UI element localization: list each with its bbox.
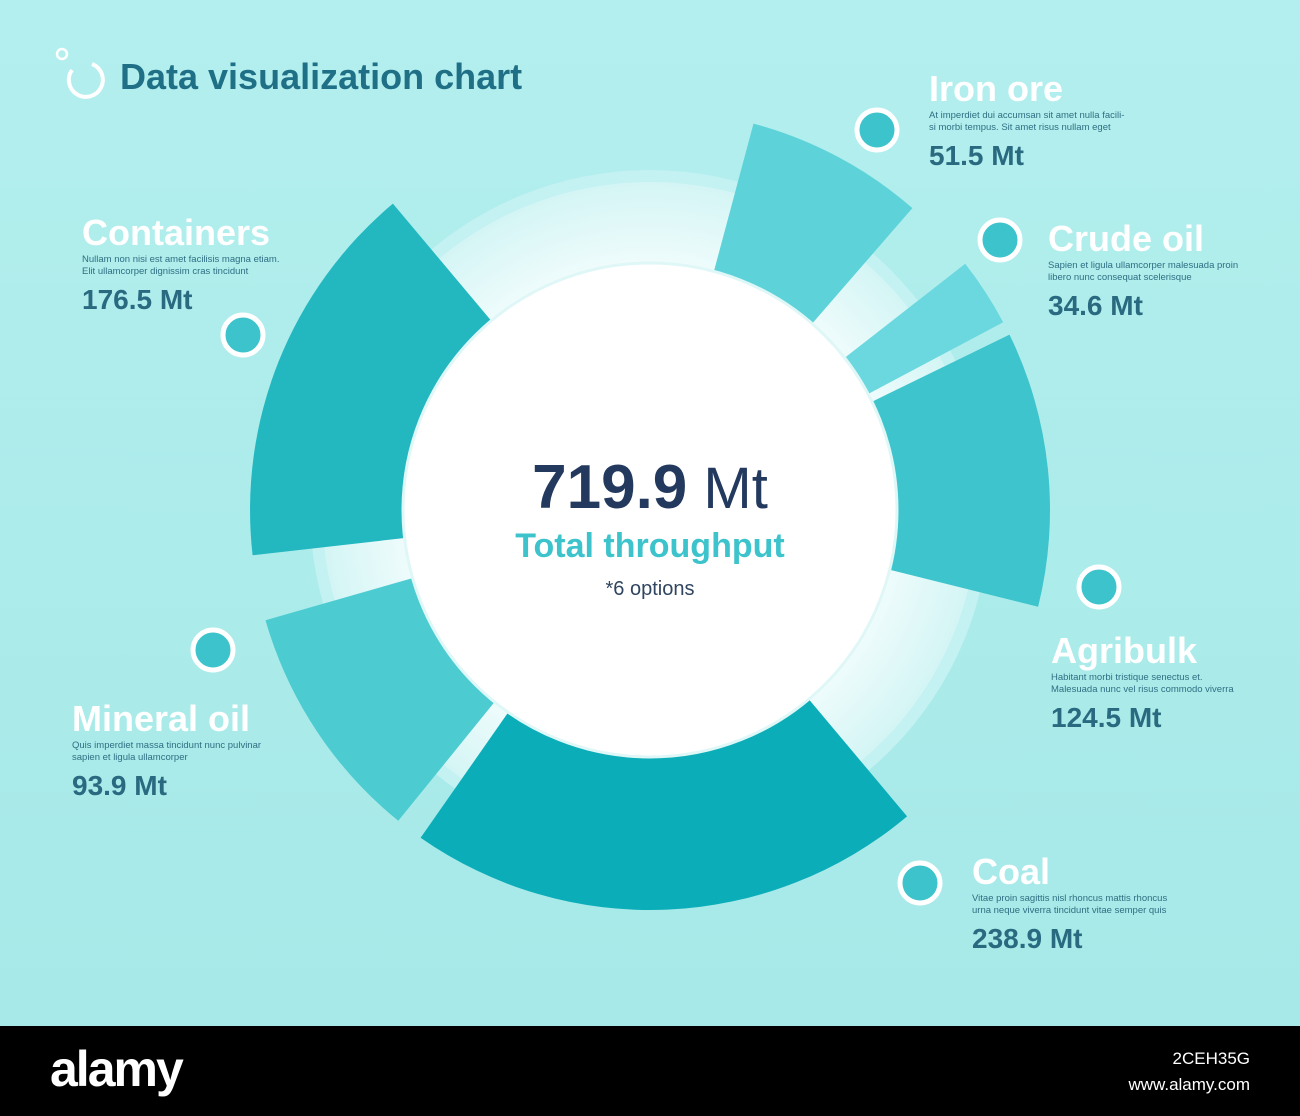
label: iron ore: si morbi tempus. Sit amet risus nullam eget bbox=[929, 122, 1111, 133]
title icon bbox=[57, 49, 103, 97]
footer bar: 2CEH35G bbox=[1173, 1049, 1250, 1068]
label: crude oil: Sapien et ligula ullamcorper malesuada proin bbox=[1048, 260, 1238, 271]
label: containers: Nullam non nisi est amet facilisis magna etiam. bbox=[82, 254, 279, 265]
label: mineral oil bbox=[72, 698, 261, 801]
label: containers: 176.5 Mt bbox=[82, 284, 192, 315]
label: coal: Coal bbox=[972, 851, 1050, 892]
segment: mineral oil bbox=[266, 578, 495, 821]
footer bar bbox=[0, 1026, 1300, 1116]
label: coal: urna neque viverra tincidunt vitae semper quis bbox=[972, 905, 1166, 916]
label: crude oil: 34.6 Mt bbox=[1048, 290, 1143, 321]
label: agribulk: Habitant morbi tristique senectus et. bbox=[1051, 672, 1203, 683]
label: iron ore: Iron ore bbox=[929, 68, 1063, 109]
footer bar: www.alamy.com bbox=[1128, 1075, 1250, 1094]
label: crude oil: Crude oil bbox=[1048, 218, 1204, 259]
segment: crude oil bbox=[845, 264, 1003, 394]
label: coal: Vitae proin sagittis nisl rhoncus mattis rhoncus bbox=[972, 893, 1167, 904]
footer bar: alamy bbox=[50, 1041, 182, 1097]
center label: Total throughput bbox=[515, 527, 785, 565]
label: agribulk: Malesuada nunc vel risus commodo viverra bbox=[1051, 684, 1234, 695]
label: containers: Elit ullamcorper dignissim cras tincidunt bbox=[82, 266, 248, 277]
label: mineral oil: Quis imperdiet massa tincidunt nunc pulvinar bbox=[72, 740, 261, 751]
segment: coal bbox=[421, 699, 907, 910]
label: crude oil: libero nunc consequat scelerisque bbox=[1048, 272, 1192, 283]
label: coal bbox=[972, 851, 1167, 954]
label: containers: Containers bbox=[82, 212, 270, 253]
center value: 719.9 Mt bbox=[532, 453, 768, 522]
label: agribulk: 124.5 Mt bbox=[1051, 702, 1162, 733]
label: agribulk: Agribulk bbox=[1051, 630, 1197, 671]
center note: *6 options bbox=[606, 578, 694, 600]
markers bbox=[193, 110, 1119, 903]
label: iron ore: 51.5 Mt bbox=[929, 140, 1024, 171]
label: coal: 238.9 Mt bbox=[972, 923, 1082, 954]
label: mineral oil: sapien et ligula ullamcorper bbox=[72, 752, 188, 763]
segment: agribulk bbox=[872, 335, 1050, 607]
label: containers bbox=[82, 212, 279, 315]
ring background bbox=[310, 170, 990, 850]
label: mineral oil: Mineral oil bbox=[72, 698, 250, 739]
label: agribulk bbox=[1051, 630, 1234, 733]
label: crude oil bbox=[1048, 218, 1238, 321]
label: iron ore bbox=[929, 68, 1124, 171]
center circle bbox=[403, 263, 897, 757]
segment: iron ore bbox=[714, 124, 912, 324]
title: Data visualization chart bbox=[120, 56, 522, 97]
segment: containers bbox=[250, 204, 491, 555]
label: mineral oil: 93.9 Mt bbox=[72, 770, 167, 801]
label: iron ore: At imperdiet dui accumsan sit amet nulla facili- bbox=[929, 110, 1124, 121]
